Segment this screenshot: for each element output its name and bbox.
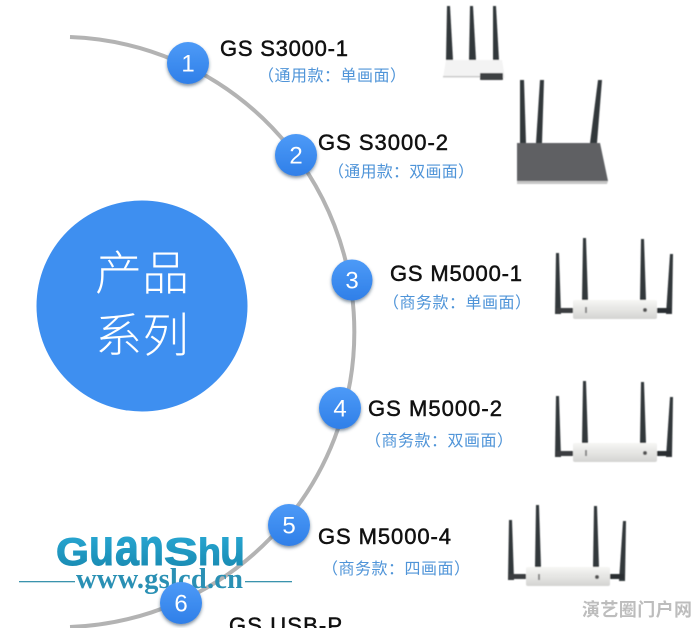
item 5: heading and subtitle: （商务款：四画面） xyxy=(322,560,470,578)
number badge 2: 2 xyxy=(289,142,303,170)
number badge 1 xyxy=(167,42,209,84)
number badge 3: 3 xyxy=(345,268,359,294)
big circle: product series xyxy=(36,200,248,412)
logo: GuanShu website mark: www.gslcd.cn xyxy=(76,564,243,595)
curved timeline arc xyxy=(70,37,354,627)
number badge 3 xyxy=(332,260,372,300)
item 4: heading and subtitle: （商务款：双画面） xyxy=(365,432,513,450)
router 4 image xyxy=(555,381,673,462)
big circle: product series: 产品 xyxy=(95,247,189,300)
number badge 4: 4 xyxy=(333,396,347,422)
item 4: heading and subtitle: GS M5000-2 xyxy=(368,396,502,421)
item 5: heading and subtitle: GS M5000-4 xyxy=(318,524,451,549)
logo: GuanShu website mark: u xyxy=(220,519,245,577)
logo: GuanShu website mark xyxy=(19,519,292,595)
router 1 image xyxy=(443,6,505,80)
big circle: product series: 系列 xyxy=(95,309,189,362)
watermark: 演艺圈门户网 xyxy=(582,599,692,620)
number badge 4 xyxy=(319,387,361,429)
logo: GuanShu website mark: u xyxy=(89,519,114,577)
logo: GuanShu website mark: h xyxy=(198,532,221,574)
item 1: heading and subtitle: （通用款：单画面） xyxy=(258,67,406,85)
item 2: heading and subtitle: GS S3000-2 xyxy=(318,130,448,155)
item 3: heading and subtitle: GS M5000-1 xyxy=(390,261,522,286)
item 5: heading and subtitle xyxy=(318,524,470,578)
item 2: heading and subtitle: （通用款：双画面） xyxy=(328,163,474,181)
number badge 1: 1 xyxy=(181,50,195,78)
number badge 2 xyxy=(275,134,317,176)
logo: GuanShu website mark: n xyxy=(139,519,164,577)
logo: GuanShu website mark: S xyxy=(164,531,198,574)
item 1: heading and subtitle: GS S3000-1 xyxy=(220,36,348,61)
item 3: heading and subtitle: （商务款：单画面） xyxy=(383,294,531,312)
item 3: heading and subtitle xyxy=(383,261,531,312)
logo: GuanShu website mark: a xyxy=(115,519,140,577)
router 5 image xyxy=(508,505,626,586)
router 2 image xyxy=(517,80,608,184)
logo: GuanShu website mark: G xyxy=(56,531,89,574)
item 2: heading and subtitle xyxy=(318,130,474,181)
number badge 6: 6 xyxy=(174,590,188,618)
number badge 5: 5 xyxy=(282,512,296,540)
router 3 image xyxy=(555,238,673,319)
item 1: heading and subtitle xyxy=(220,36,406,85)
number badge 5 xyxy=(268,504,310,546)
number badge 6 xyxy=(160,582,202,624)
item 4: heading and subtitle xyxy=(365,396,513,450)
